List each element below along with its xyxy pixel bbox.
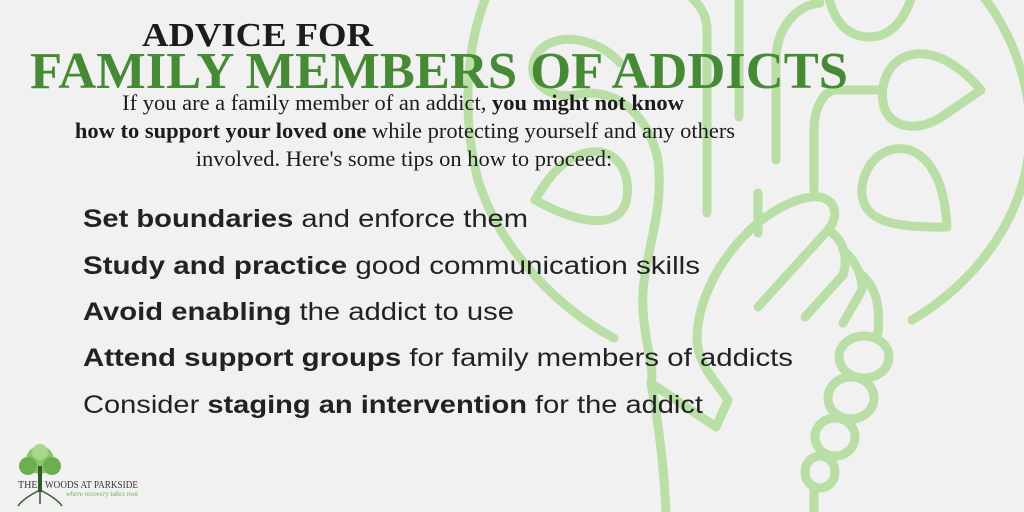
intro paragraph <box>75 90 735 171</box>
logo: The Woods at Parkside: WOODS AT PARKSIDE <box>45 480 138 491</box>
tips list: Attend support groups for family members of addicts <box>83 344 793 372</box>
tips list: Set boundaries and enforce them <box>83 205 528 233</box>
tips list <box>83 205 793 419</box>
tips list: Study and practice good communication skills <box>83 252 700 280</box>
title: ADVICE FOR: ADVICE FOR <box>142 17 373 54</box>
title: FAMILY MEMBERS OF ADDICTS: FAMILY MEMBERS OF ADDICTS <box>30 43 848 100</box>
background illustration: hand holding plant <box>468 0 1024 512</box>
tips list: Avoid enabling the addict to use <box>83 298 514 326</box>
logo: The Woods at Parkside: where recovery takes root <box>66 490 139 498</box>
tips list: Consider staging an intervention for the addict <box>83 391 703 419</box>
logo: The Woods at Parkside <box>18 444 139 506</box>
intro paragraph: how to support your loved one while protecting yourself and any others <box>75 118 735 143</box>
intro paragraph: involved. Here's some tips on how to proceed: <box>196 146 612 171</box>
icon: tree <box>18 444 62 506</box>
intro paragraph: If you are a family member of an addict, you might not know <box>122 90 685 115</box>
logo: The Woods at Parkside: THE <box>18 480 37 491</box>
